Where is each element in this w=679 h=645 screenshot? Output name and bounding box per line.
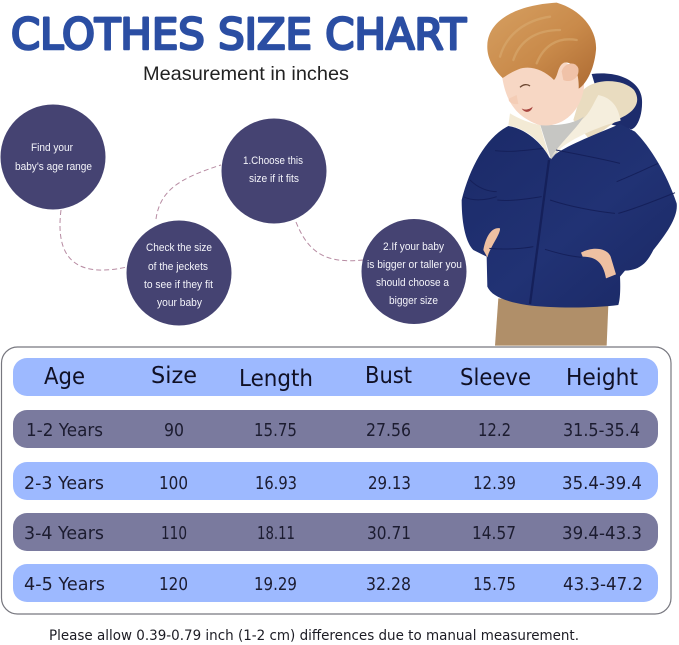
row: 4-5 years: 32.28: [366, 575, 411, 595]
row: 3-4 years: [13, 513, 658, 551]
step circle: choose a bigger size: 2.If your baby: [383, 241, 444, 253]
footnote: Please allow 0.39-0.79 inch (1-2 cm) differences due to manual measurement.: [49, 628, 579, 644]
row: 1-2 years: 27.56: [366, 421, 411, 441]
row: 4-5 years: 19.29: [254, 575, 297, 595]
row: 3-4 years: 3-4 Years: [24, 524, 104, 544]
row: 1-2 years: 90: [164, 421, 184, 441]
row: 3-4 years: 18.11: [257, 524, 295, 544]
step circle: choose a bigger size: bigger size: [389, 295, 438, 307]
row: 1-2 years: 31.5-35.4: [563, 421, 640, 441]
size table panel: [2, 347, 671, 614]
row: 4-5 years: [13, 564, 658, 602]
step circle: choose this size: 1.Choose this: [243, 155, 303, 167]
row: 2-3 years: 100: [159, 474, 188, 494]
step circle: check the size: of the jeckets: [148, 261, 208, 273]
row: 2-3 years: 12.39: [473, 474, 516, 494]
step circle: choose this size: [222, 118, 326, 224]
header row: Length: [239, 366, 313, 392]
row: 1-2 years: [13, 410, 658, 448]
step circle: check the size: to see if they fit: [144, 279, 213, 291]
row: 2-3 years: 2-3 Years: [24, 474, 104, 494]
photo: boy in navy puffer jacket: [462, 3, 677, 346]
step circle: choose this size: size if it fits: [249, 173, 299, 185]
step circle: find age range: baby's age range: [15, 161, 92, 173]
header row: [13, 358, 658, 396]
row: 4-5 years: 43.3-47.2: [563, 575, 643, 595]
step circle: check the size: [126, 220, 232, 326]
row: 3-4 years: 14.57: [472, 524, 516, 544]
step circle: find age range: [0, 104, 106, 210]
header row: Bust: [365, 363, 412, 389]
header row: Size: [151, 363, 197, 389]
step circle: choose a bigger size: [362, 219, 466, 324]
row: 4-5 years: 120: [159, 575, 188, 595]
step circle: choose a bigger size: is bigger or taller you: [367, 259, 462, 271]
row: 2-3 years: [13, 462, 658, 500]
header row: Height: [566, 365, 638, 391]
row: 4-5 years: 15.75: [473, 575, 516, 595]
row: 4-5 years: 4-5 Years: [24, 575, 105, 595]
row: 3-4 years: 110: [161, 524, 187, 544]
step circle: check the size: Check the size: [146, 242, 212, 254]
step circle: choose a bigger size: should choose a: [376, 277, 450, 289]
row: 2-3 years: 29.13: [368, 474, 411, 494]
header row: Sleeve: [460, 365, 531, 391]
dashed connectors: [60, 165, 363, 270]
step circle: find age range: Find your: [31, 142, 73, 154]
row: 3-4 years: 30.71: [367, 524, 411, 544]
row: 1-2 years: 15.75: [254, 421, 297, 441]
subtitle: Measurement in inches: [143, 63, 349, 85]
header row: Age: [44, 364, 85, 390]
row: 2-3 years: 35.4-39.4: [562, 474, 642, 494]
row: 1-2 years: 1-2 Years: [26, 421, 103, 441]
row: 1-2 years: 12.2: [478, 421, 511, 441]
row: 3-4 years: 39.4-43.3: [562, 524, 642, 544]
step circle: check the size: your baby: [157, 297, 202, 309]
row: 2-3 years: 16.93: [255, 474, 297, 494]
title: CLOTHES SIZE CHART: [11, 10, 467, 60]
